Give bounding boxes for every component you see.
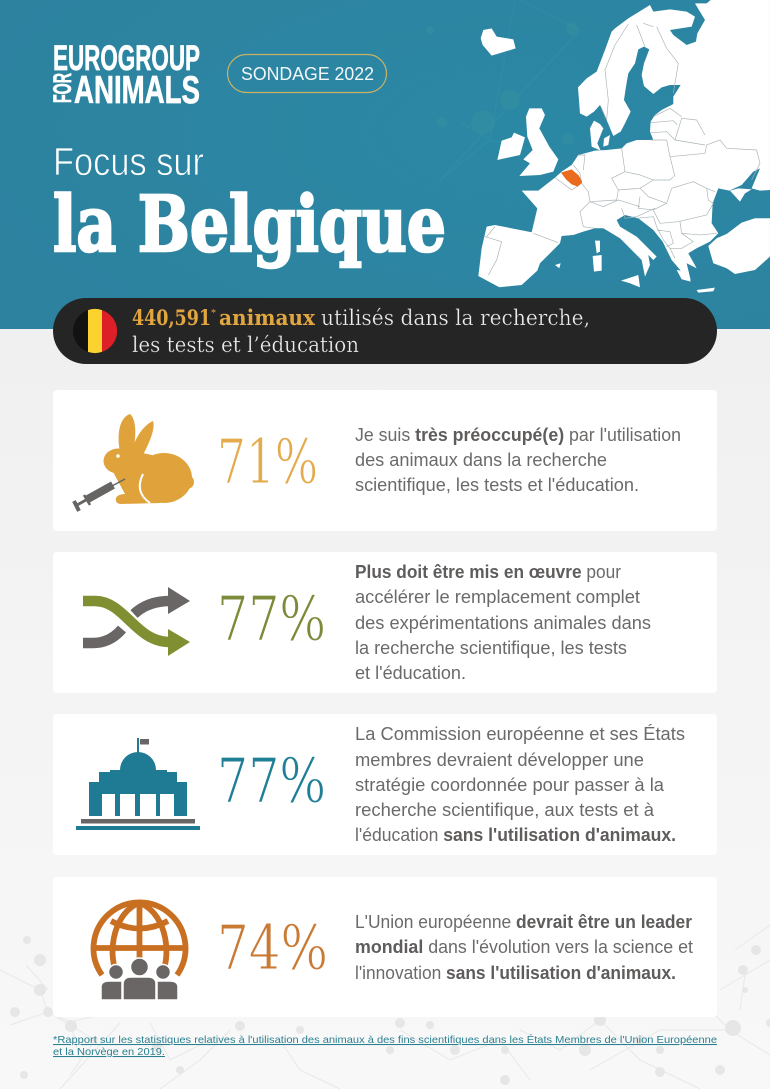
logo: FOR xyxy=(49,73,77,103)
banner: animals used xyxy=(53,298,717,364)
text: replacement statement xyxy=(355,561,651,683)
text: commission statement: stratégie coordonnée pour passer à la xyxy=(355,774,665,795)
icon: crossing arrows xyxy=(83,587,190,656)
banner text: 440,591 xyxy=(132,306,211,331)
stat: 77% green: 77% xyxy=(217,582,326,655)
text: replacement statement: la recherche scientifique, les tests xyxy=(355,637,627,658)
stat: 77% blue: 77% xyxy=(217,744,326,817)
logo xyxy=(49,39,200,112)
Great Britain xyxy=(519,108,558,176)
footnote xyxy=(53,1033,717,1058)
title: Focus sur: Focus sur xyxy=(53,141,204,184)
text: commission statement: l'éducation sans l'utilisation d'animaux. xyxy=(355,824,676,845)
banner text: utilisés dans la recherche, xyxy=(321,306,590,331)
text: commission statement: membres devraient développer une xyxy=(355,749,644,770)
Belgium highlighted xyxy=(561,169,582,187)
title: la Belgique: la Belgique xyxy=(53,180,446,270)
Denmark xyxy=(590,121,610,151)
text: EU leader statement: L'Union européenne devrait être un leader xyxy=(355,911,692,932)
badge: sondage 2022 xyxy=(228,54,386,92)
icon: parliament building xyxy=(76,738,200,830)
text: EU leader statement: mondial dans l'évolution vers la science et xyxy=(355,936,693,957)
text: concern statement xyxy=(355,424,681,495)
country borders xyxy=(485,23,760,275)
text: commission statement: La Commission européenne et ses États xyxy=(355,723,685,744)
logo: EUROGROUP xyxy=(53,39,200,78)
panel: card 1 concern xyxy=(53,390,717,531)
banner text xyxy=(132,306,590,358)
map of Europe xyxy=(478,0,770,293)
text: replacement statement: accélérer le remplacement complet xyxy=(355,586,640,607)
logo: ANIMALS xyxy=(74,69,200,112)
stat: 74%: 74% xyxy=(217,911,328,984)
Turkey xyxy=(708,218,770,274)
panel: teal header background xyxy=(0,0,770,329)
Iceland xyxy=(481,28,516,56)
icon: Belgian flag xyxy=(73,309,117,353)
footnote: et la Norvège en 2019. xyxy=(53,1046,165,1058)
Ireland xyxy=(497,133,525,160)
text: replacement statement: des expérimentations animales dans xyxy=(355,612,651,633)
text: EU leader statement xyxy=(355,911,693,983)
text: EU leader statement: l'innovation sans l'utilisation d'animaux. xyxy=(355,962,676,983)
Mediterranean islands xyxy=(555,241,715,293)
text: concern statement: des animaux dans la recherche xyxy=(355,449,607,470)
text: commission statement: recherche scientifique, aux tests et à xyxy=(355,799,655,820)
footnote: *Rapport sur les statistiques relatives à l'utilisation des animaux à des fins scientifiques dans les États Membres de l'Union Européenne xyxy=(53,1033,717,1046)
badge: sondage 2022: SONDAGE 2022 xyxy=(241,63,374,84)
banner text: animaux xyxy=(219,306,315,331)
stat: 71%: 71% xyxy=(217,425,318,498)
continental Europe and Scandinavia xyxy=(478,0,770,287)
text: replacement statement: Plus doit être mis en œuvre pour xyxy=(355,561,621,582)
text: commission statement xyxy=(355,723,685,845)
banner text: * xyxy=(211,308,216,319)
Crimea xyxy=(730,188,752,202)
icon: globe with people xyxy=(94,902,186,1000)
panel: card 2 replacement xyxy=(53,552,717,693)
banner text: les tests et l’éducation xyxy=(132,333,359,358)
panel: card 4 EU leader xyxy=(53,877,717,1017)
text: concern statement: Je suis très préoccupé(e) par l'utilisation xyxy=(355,424,681,445)
text: replacement statement: et l'éducation. xyxy=(355,662,466,683)
text: concern statement: scientifique, les tests et l'éducation. xyxy=(355,474,639,495)
panel: card 3 commission xyxy=(53,714,717,855)
icon: rabbit with syringe xyxy=(74,414,194,511)
